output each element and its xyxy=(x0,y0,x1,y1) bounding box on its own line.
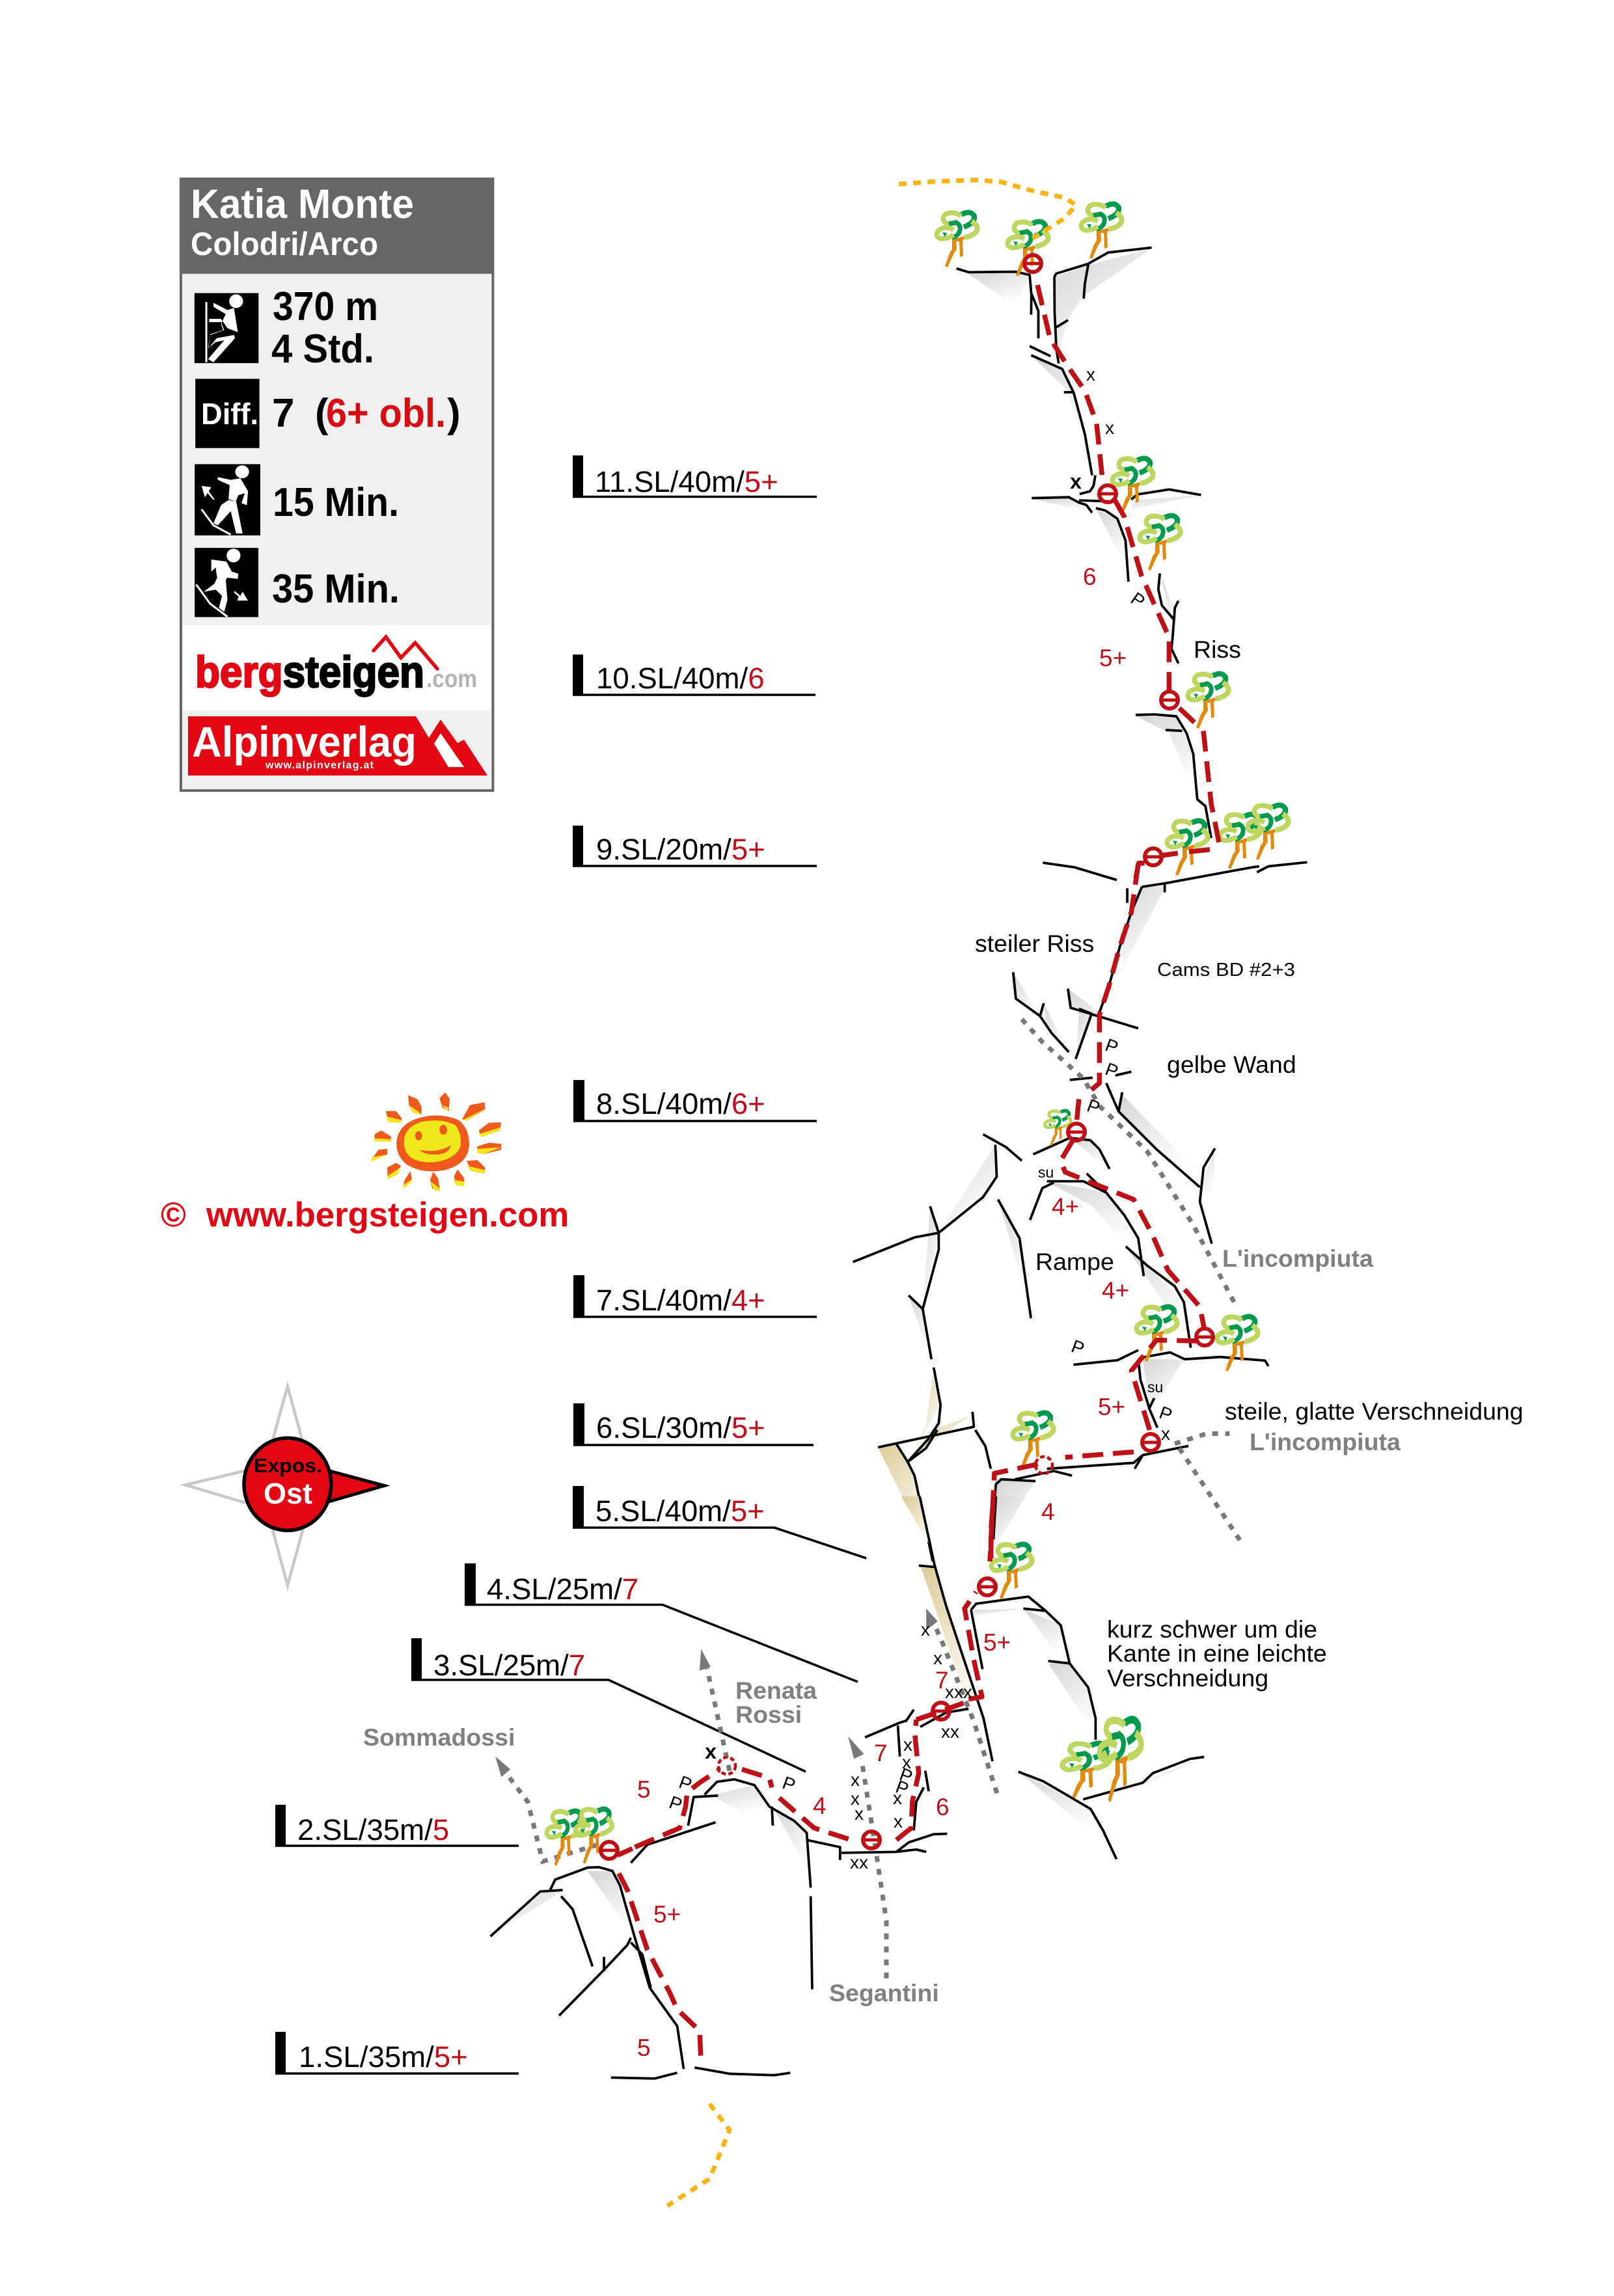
other routes: grey dotted xyxy=(495,1020,1241,1979)
icon: descent walker xyxy=(195,548,258,617)
rock: lower section xyxy=(491,1496,1204,2079)
protection marks: bolts: x xyxy=(855,1803,864,1824)
title: Katia Monte xyxy=(191,182,414,227)
logo text: bergsteigen: bergsteigen xyxy=(195,647,424,697)
pitch 9: 9.SL/20m/5+ xyxy=(596,833,765,866)
protection marks: bolts: x xyxy=(893,1788,902,1808)
rock: middle section xyxy=(853,862,1307,1561)
lower rock shadows xyxy=(493,1496,1203,2031)
difficulty: ) xyxy=(447,391,461,436)
route notes: Riss xyxy=(1194,636,1241,663)
pitch labels xyxy=(275,455,866,2074)
pitch 4: 4.SL/25m/7 xyxy=(487,1573,638,1606)
neighbouring route names: Rossi xyxy=(735,1701,802,1728)
difficulty: 7 xyxy=(272,391,294,436)
grades along the route: 7 xyxy=(874,1740,888,1766)
protection marks: bolts: x xyxy=(705,1740,717,1763)
logo text: .com: .com xyxy=(426,666,477,693)
route notes: steiler Riss xyxy=(975,930,1094,957)
logo: Alpinverlag white peak xyxy=(434,733,464,767)
pitch 1 xyxy=(275,2032,519,2074)
pitch 2: 2.SL/35m/5 xyxy=(297,1813,449,1846)
protection marks: bolts: x xyxy=(1105,418,1114,438)
pitch 7 xyxy=(573,1275,817,1317)
pitch 6: 6.SL/30m/5+ xyxy=(596,1411,765,1444)
upper rock shadows xyxy=(966,249,1201,800)
neighbouring route names: L'incompiuta xyxy=(1222,1245,1374,1272)
icon label: Diff.: Diff. xyxy=(201,397,258,431)
grades along the route: 5+ xyxy=(983,1629,1011,1656)
grades along the route: 5 xyxy=(637,1776,651,1803)
panel background xyxy=(181,179,493,790)
length: 370 m xyxy=(273,284,378,329)
grades along the route: 5+ xyxy=(1099,645,1127,671)
compass label: Expos. xyxy=(254,1454,322,1477)
logo roof line xyxy=(374,637,437,669)
panel text xyxy=(188,182,487,776)
protection marks: bolts: x xyxy=(903,1735,912,1755)
route notes: Verschneidung xyxy=(1107,1664,1268,1692)
grades along the route: 5+ xyxy=(653,1901,681,1928)
grades along the route xyxy=(637,563,1129,2061)
middle rock lines xyxy=(853,862,1307,1561)
compass star points xyxy=(185,1386,303,1586)
pitch 3: 3.SL/25m/7 xyxy=(433,1649,585,1682)
route upper pitches xyxy=(1037,285,1220,878)
east pointer xyxy=(329,1471,385,1502)
pitch 10: 10.SL/40m/6 xyxy=(596,662,765,695)
neighbouring route names: Sommadossi xyxy=(363,1723,515,1751)
pitch 1: 1.SL/35m/5+ xyxy=(299,2040,468,2073)
icon: climber xyxy=(195,293,258,363)
protection marks: pitons: P xyxy=(1156,1402,1175,1425)
copyright url: © xyxy=(161,1196,186,1234)
pitch 5 xyxy=(573,1486,866,1558)
grades along the route: 6 xyxy=(936,1794,950,1820)
route arrow right xyxy=(926,1608,997,1793)
grades along the route: 5+ xyxy=(1098,1394,1125,1420)
grades along the route: 6 xyxy=(1083,563,1097,590)
grades along the route: 4 xyxy=(813,1792,827,1819)
neighbouring route names: Segantini xyxy=(829,1979,939,2006)
climbing route xyxy=(618,285,1220,2064)
sun ray highlights xyxy=(371,1105,501,1191)
protection marks: bolts: x xyxy=(921,1619,930,1640)
pitch 4 xyxy=(465,1563,858,1682)
protection marks: pitons: P xyxy=(666,1792,685,1815)
route Segantini xyxy=(848,1736,886,1979)
panel header band xyxy=(180,178,493,274)
icon: sun xyxy=(371,1092,501,1191)
protection marks: pitons: P xyxy=(1102,1059,1121,1082)
protection marks: bolts: x xyxy=(933,1648,942,1668)
neighbouring route names: Renata xyxy=(735,1677,817,1704)
pitch 10 xyxy=(573,655,815,696)
compass value: Ost xyxy=(264,1477,312,1510)
protection marks: bolts: xx xyxy=(941,1722,959,1742)
sun rays xyxy=(371,1092,501,1191)
copyright url: www.bergsteigen.com xyxy=(206,1196,569,1234)
protection marks: bolts: x xyxy=(851,1789,860,1809)
route notes: gelbe Wand xyxy=(1167,1051,1296,1078)
panel: route facts xyxy=(180,178,493,790)
rock: upper section xyxy=(957,247,1211,838)
route notes: su xyxy=(1038,1164,1054,1181)
subtitle: Colodri/Arco xyxy=(191,226,378,262)
icon: exposure compass xyxy=(185,1386,385,1586)
protection marks: pitons xyxy=(666,588,1175,1815)
pitch 5: 5.SL/40m/5+ xyxy=(595,1494,765,1528)
pitch 8: 8.SL/40m/6+ xyxy=(596,1087,765,1120)
logo text: url: www.alpinverlag.at xyxy=(265,760,374,771)
yellow wall shading xyxy=(878,1375,969,1558)
logo text: Alpinverlag: Alpinverlag xyxy=(192,718,417,766)
descent time: 35 Min. xyxy=(272,567,400,612)
protection marks: bolts: x xyxy=(851,1770,860,1790)
protection marks: bolts: x xyxy=(902,1752,911,1772)
protection marks: bolts xyxy=(705,364,1170,1872)
route notes: Rampe xyxy=(1035,1248,1114,1275)
pitch 9 xyxy=(573,826,817,867)
sun face xyxy=(396,1116,469,1171)
protection marks: pitons: P xyxy=(1102,1034,1121,1058)
grades along the route: 4+ xyxy=(1102,1277,1129,1304)
protection marks: pitons: P xyxy=(1084,1095,1102,1118)
route notes: steile, glatte Verschneidung xyxy=(1225,1398,1524,1425)
route middle pitches xyxy=(990,864,1205,1561)
difficulty: ( xyxy=(315,391,329,436)
time: 4 Std. xyxy=(271,327,374,371)
route Sommadossi xyxy=(495,1757,597,1861)
pitch 3 xyxy=(411,1638,806,1772)
protection marks: pitons: P xyxy=(676,1772,694,1795)
logo band: bergsteigen xyxy=(183,625,491,710)
protection marks: bolts: x xyxy=(1161,1424,1170,1444)
protection marks: bolts: xxx xyxy=(945,1682,972,1702)
difficulty: 6+ obl. xyxy=(326,391,446,436)
route Renata Rossi xyxy=(700,1649,730,1771)
trees xyxy=(547,204,1289,1866)
approach path top xyxy=(899,180,1076,240)
lower rock lines xyxy=(491,1496,1204,2079)
pitch 11: 11.SL/40m/5+ xyxy=(595,465,778,498)
protection marks: pitons: P xyxy=(1127,588,1149,612)
pitch 6 xyxy=(573,1403,814,1446)
difficulty xyxy=(272,391,461,436)
grades along the route: 5 xyxy=(637,2034,651,2061)
protection marks: pitons: P xyxy=(897,1764,915,1787)
route lower pitches xyxy=(618,1496,994,2064)
grades along the route: 4+ xyxy=(1052,1193,1079,1220)
route L'incompiuta lower xyxy=(1175,1434,1241,1542)
pitch 8 xyxy=(573,1080,817,1122)
protection marks: bolts: x xyxy=(894,1811,903,1831)
grades along the route: 4 xyxy=(1041,1498,1055,1525)
protection marks: pitons: P xyxy=(1069,1336,1087,1359)
lower wall shading xyxy=(901,1496,983,1826)
logo: Alpinverlag red shape xyxy=(188,716,487,776)
neighbouring route names: L'incompiuta xyxy=(1250,1428,1401,1455)
protection marks: bolts: x xyxy=(1070,470,1082,493)
pitch 2 xyxy=(275,1805,519,1846)
middle rock shadows xyxy=(909,887,1215,1539)
approach path bottom xyxy=(667,2104,730,2206)
approach time: 15 Min. xyxy=(273,480,399,525)
route notes xyxy=(975,636,1524,1692)
pitch 7: 7.SL/40m/4+ xyxy=(596,1284,765,1317)
route notes: Cams BD #2+3 xyxy=(1157,960,1295,980)
grades along the route: 7 xyxy=(935,1667,949,1694)
route notes: Kante in eine leichte xyxy=(1107,1640,1327,1667)
pitch 11 xyxy=(573,455,817,498)
protection marks: pitons: P xyxy=(780,1772,798,1796)
neighbouring route names xyxy=(363,1245,1401,2006)
icon: approach walker xyxy=(195,464,260,535)
compass disc xyxy=(244,1438,331,1530)
belays xyxy=(601,255,1213,1859)
protection marks: pitons: P xyxy=(893,1776,911,1800)
upper rock lines xyxy=(957,247,1211,838)
protection marks: bolts: xx xyxy=(850,1852,868,1872)
route L'incompiuta upper xyxy=(1022,1020,1234,1303)
route notes: su xyxy=(1147,1379,1163,1396)
route notes: kurz schwer um die xyxy=(1107,1615,1317,1643)
protection marks: bolts: x xyxy=(1086,364,1095,385)
icon: difficulty xyxy=(195,379,260,448)
